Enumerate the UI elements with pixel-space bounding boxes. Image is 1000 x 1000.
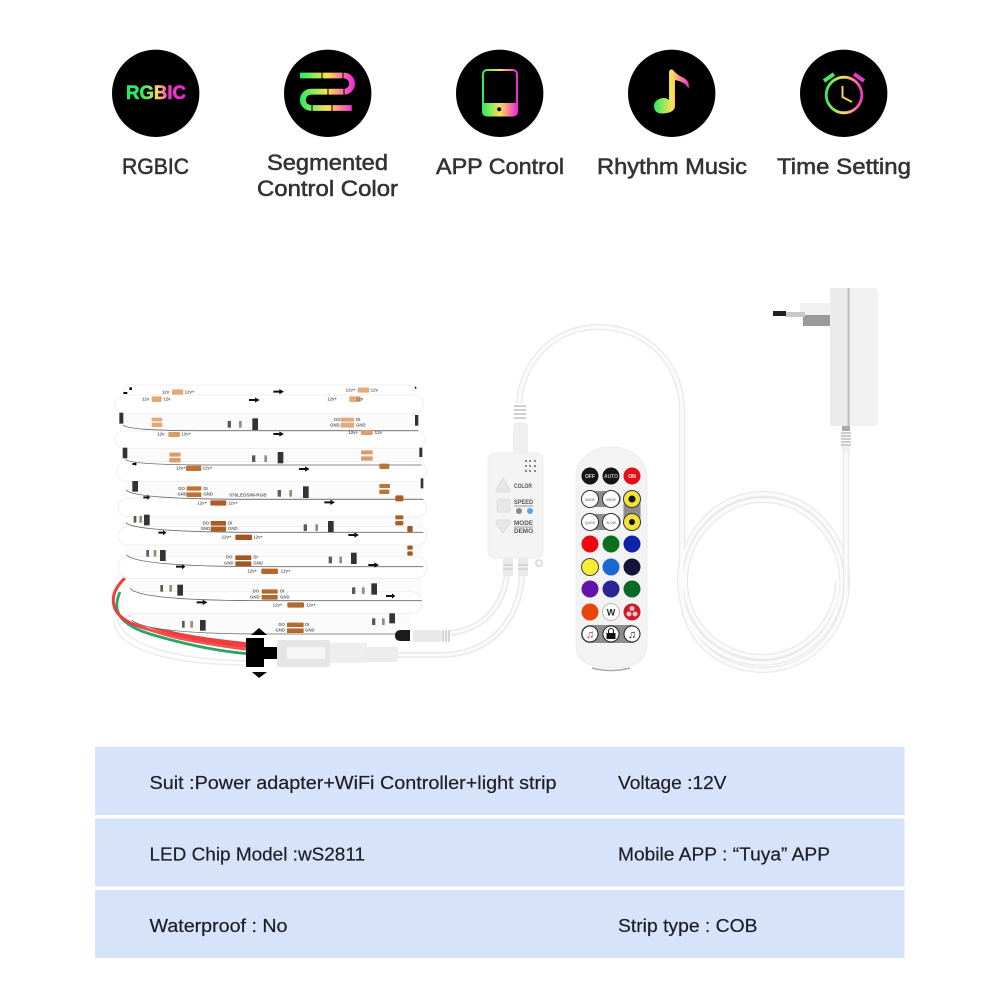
strip printed labels: GND xyxy=(305,628,315,633)
strip printed labels: 12v+ xyxy=(348,430,359,435)
WiFi controller xyxy=(488,406,543,576)
icon: RGBIC badge: RGBIC xyxy=(126,82,186,104)
strip printed labels: 12v+ xyxy=(253,535,264,540)
strip printed labels: GND xyxy=(250,594,260,599)
strip printed labels: DI xyxy=(356,417,360,422)
controller labels: SPEED xyxy=(514,500,534,506)
strip printed labels: 12v+ xyxy=(247,569,258,574)
strip printed labels: DO xyxy=(253,589,260,594)
controller legs xyxy=(503,558,528,576)
direction arrows xyxy=(123,387,416,605)
controller labels xyxy=(514,484,534,535)
remote row: music and lock: ♫ xyxy=(586,629,594,641)
row: chip model and app: LED Chip Model :wS2811 xyxy=(150,844,365,864)
strip printed labels: 12v+ xyxy=(346,388,356,393)
strip wires xyxy=(113,578,250,665)
strip printed labels: 576LEDS/M-RGB xyxy=(229,493,267,498)
strip printed labels: 12v+ xyxy=(228,500,238,505)
coil turns xyxy=(115,385,427,634)
copper solder pads xyxy=(152,388,413,633)
icon: segmented strip xyxy=(284,50,371,137)
strip printed labels: GND xyxy=(330,423,340,428)
row: waterproof and strip type: Strip type : COB xyxy=(618,916,758,936)
LED strip coil xyxy=(113,385,427,665)
strip printed labels xyxy=(142,388,382,633)
strip board edges xyxy=(123,425,423,634)
controller buttons xyxy=(496,478,510,533)
spec table xyxy=(95,747,904,958)
remote row: OFF AUTO ON: AUTO xyxy=(604,474,618,480)
chips xyxy=(119,413,423,631)
strip printed labels: 12v xyxy=(142,396,150,401)
strip board fill xyxy=(122,413,423,634)
row: waterproof and strip type: Waterproof : No xyxy=(150,916,288,936)
remote row: music and lock xyxy=(582,626,640,642)
strip printed labels: 12v xyxy=(157,432,165,437)
label: Time Setting: Time Setting xyxy=(777,154,911,179)
label: RGBIC: RGBIC xyxy=(122,154,189,179)
arrow: down xyxy=(252,672,267,678)
icon: tablet xyxy=(456,50,543,137)
adapter strain relief xyxy=(841,426,851,451)
connector black plug xyxy=(246,638,277,667)
remote base shadow xyxy=(592,668,630,670)
strip printed labels: 12v+ xyxy=(273,602,283,607)
arrow: up xyxy=(251,628,267,635)
strip printed labels: 12v+ xyxy=(176,466,186,471)
strip printed labels: DI xyxy=(280,589,284,594)
remote body xyxy=(576,447,647,668)
remote colour buttons xyxy=(582,536,640,620)
remote row: mode and brightness: MODE xyxy=(585,498,595,502)
controller labels: COLOR xyxy=(514,484,533,490)
label: Segmented Control Color: Segmented xyxy=(267,150,388,175)
strip printed labels: GND xyxy=(275,628,285,633)
strip printed labels: GND xyxy=(201,526,210,531)
label: APP Control: APP Control xyxy=(436,154,564,179)
cables to connectors xyxy=(398,575,522,655)
strip printed labels: 12v xyxy=(375,430,382,435)
remote row: OFF AUTO ON: ON xyxy=(628,474,636,480)
strip printed labels: 12v xyxy=(356,396,364,401)
JST connector xyxy=(246,628,398,678)
adapter plug blades xyxy=(773,303,830,326)
strip printed labels: 12v xyxy=(371,388,378,393)
strip printed labels: 12v+ xyxy=(197,500,208,505)
remote control xyxy=(576,447,647,670)
icon: music note xyxy=(628,50,715,137)
strip printed labels: GND xyxy=(228,526,238,531)
strip printed labels: 12v xyxy=(163,396,171,401)
strip printed labels: GND xyxy=(253,561,263,566)
feature: APP control xyxy=(436,50,564,179)
controller neck xyxy=(513,406,528,453)
row: chip model and app: Mobile APP : “Tuya” APP xyxy=(618,844,830,864)
remote row: mode and brightness xyxy=(582,490,640,508)
feature: time setting xyxy=(777,50,911,179)
strip printed labels: GND xyxy=(203,491,213,496)
feature: rhythm music xyxy=(597,50,747,179)
controller labels: DEMO xyxy=(514,529,533,535)
strip printed labels: GND xyxy=(280,594,290,599)
icon: alarm clock xyxy=(800,50,887,137)
remote row: OFF AUTO ON xyxy=(582,468,640,484)
strip printed labels: 12v+ xyxy=(181,432,192,437)
feature: segmented control color xyxy=(257,50,398,201)
strip printed labels: DI xyxy=(228,520,232,525)
power adapter xyxy=(773,288,878,451)
controller body xyxy=(488,453,543,566)
remote row: quick slow xyxy=(582,514,640,530)
remote row: music and lock: ♫ xyxy=(628,629,636,641)
row: suit and voltage: Voltage :12V xyxy=(618,773,726,793)
strip printed labels: DI xyxy=(253,555,258,560)
strip printed labels: GND xyxy=(177,491,187,496)
strip printed labels: DO xyxy=(203,520,210,525)
strip printed labels: DO xyxy=(334,417,341,422)
row: chip model and app xyxy=(95,818,904,886)
row: waterproof and strip type xyxy=(95,890,904,958)
strip printed labels: 12v+ xyxy=(203,466,213,471)
row: suit and voltage: Suit :Power adapter+WiFi Controller+light strip xyxy=(150,773,556,793)
strip silicone tubes xyxy=(115,385,427,613)
strip printed labels: DO xyxy=(178,486,185,491)
strip printed labels: DI xyxy=(305,622,309,627)
remote button backplates xyxy=(581,491,640,643)
feature: RGBIC xyxy=(112,50,199,179)
strip printed labels: GND xyxy=(224,561,234,566)
strip printed labels: 12v+ xyxy=(306,602,316,607)
remote row: OFF AUTO ON: OFF xyxy=(585,474,595,480)
label: Rhythm Music: Rhythm Music xyxy=(597,154,747,179)
strip printed labels: 12v+ xyxy=(281,569,291,574)
label: Segmented Control Color xyxy=(257,150,398,201)
remote colour buttons: W xyxy=(607,608,616,618)
label: Segmented Control Color: Control Color xyxy=(257,176,398,201)
remote row: quick slow: QUICK xyxy=(585,521,596,525)
row: suit and voltage xyxy=(95,747,904,815)
strip printed labels: 12v xyxy=(162,389,170,394)
strip printed labels: DO xyxy=(226,555,233,560)
strip printed labels: 12v+ xyxy=(185,389,195,394)
controller labels: MODE xyxy=(514,521,533,527)
strip printed labels: DO xyxy=(278,622,285,627)
strip printed labels: 12v+ xyxy=(222,535,232,540)
controller speaker holes xyxy=(525,460,536,472)
power cable with coil xyxy=(519,327,847,670)
strip printed labels: DI xyxy=(203,486,208,491)
strip printed labels: GND xyxy=(356,423,366,428)
resistors and capacitors xyxy=(134,421,385,628)
strip printed labels: 12v+ xyxy=(327,396,338,401)
remote row: mode and brightness: MODE xyxy=(606,498,616,502)
DC jack connector xyxy=(395,630,450,642)
connector translucent sleeve xyxy=(277,640,398,667)
adapter body xyxy=(830,288,878,426)
remote row: quick slow: SLOW xyxy=(606,521,616,525)
